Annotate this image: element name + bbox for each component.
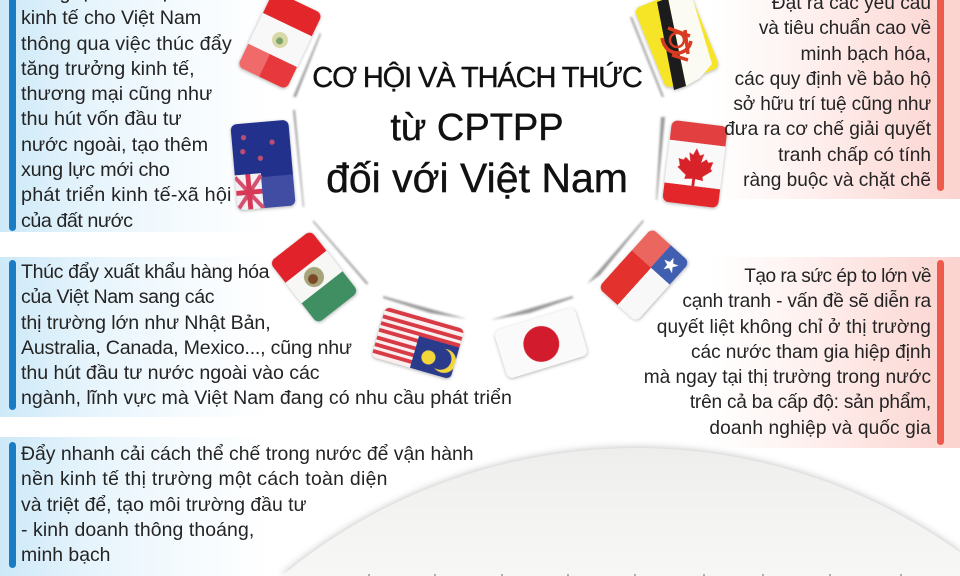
text block: high standards: ràng buộc và chặt chẽ — [743, 170, 931, 191]
blue bar: middle left — [9, 260, 16, 410]
flag: Peru — [238, 0, 322, 90]
text block: institutional reform: - kinh doanh thông thoáng, — [21, 519, 254, 541]
text block: competition pressure: cạnh tranh - vấn đề sẽ diễn ra — [682, 291, 931, 312]
text block: high standards: và tiêu chuẩn cao về — [759, 18, 931, 39]
blue bar: top left — [9, 0, 16, 231]
flag: Mexico — [270, 230, 358, 324]
text block: economic benefits — [21, 0, 235, 232]
text block: competition pressure: trên cả ba cấp độ: sản phẩm, — [690, 392, 931, 413]
panel: left bottom background — [0, 437, 330, 576]
flag: Japan — [494, 307, 588, 379]
text block: economic benefits: thu hút vốn đầu tư — [21, 108, 182, 130]
text block: competition pressure: các nước tham gia hiệp định — [691, 342, 931, 363]
text block: competition pressure: mà ngay tại thị trường trong nước — [644, 367, 931, 388]
plate: bottom circle — [282, 448, 960, 576]
flag: Brunei — [634, 0, 720, 90]
text block: economic benefits: phát triển kinh tế-xã hội — [21, 184, 232, 206]
panel: left middle background — [0, 257, 330, 417]
flag: Malaysia — [371, 307, 466, 380]
text block: export promotion — [21, 261, 512, 409]
text block: high standards: đưa ra cơ chế giải quyết — [724, 119, 931, 140]
text block: economic benefits: nước ngoài, tạo thêm — [21, 134, 208, 156]
text block: economic benefits: thương mại cũng như — [21, 83, 212, 105]
text block: economic benefits: tăng trưởng kinh tế, — [21, 58, 195, 80]
text block: economic benefits: của đất nước — [21, 210, 132, 232]
title — [312, 62, 642, 201]
flag: Canada — [662, 120, 728, 208]
text block: export promotion: thu hút đầu tư nước ngoài vào các — [21, 362, 320, 384]
text block: export promotion: Australia, Canada, Mexico..., cũng như — [21, 337, 352, 359]
flag: New Zealand — [230, 120, 296, 210]
title line 2: từ CPTPP — [390, 107, 564, 149]
text block: competition pressure — [644, 266, 932, 439]
graphic: plate, wheel and flags — [229, 0, 960, 576]
text block: institutional reform — [21, 443, 474, 566]
text block: high standards — [724, 0, 931, 191]
wheel: shadow spokes between flags — [293, 17, 665, 320]
title line 3: đối với Việt Nam — [326, 155, 628, 201]
text block: competition pressure: doanh nghiệp và quốc gia — [709, 418, 931, 439]
text block: high standards: sở hữu trí tuệ cũng như — [733, 94, 931, 115]
text block: economic benefits: xung lực mới cho — [21, 159, 170, 181]
panel: left top background — [0, 0, 330, 232]
text block: institutional reform: và triệt để, tạo môi trường đầu tư — [21, 494, 307, 516]
flag: Chile — [598, 228, 690, 322]
text block: export promotion: Thúc đẩy xuất khẩu hàng hóa — [21, 261, 269, 283]
text block: institutional reform: nền kinh tế thị trường một cách toàn diện — [21, 468, 388, 490]
red bar: bottom right — [937, 260, 944, 445]
text block: export promotion: của Việt Nam sang các — [21, 286, 214, 308]
text block: export promotion: ngành, lĩnh vực mà Việt Nam đang có nhu cầu phát triển — [21, 387, 512, 409]
text block: competition pressure: quyết liệt không chỉ ở thị trường — [657, 317, 931, 338]
text block: institutional reform: Đẩy nhanh cải cách thể chế trong nước để vận hành — [21, 443, 474, 465]
panel: right bottom background — [700, 257, 960, 448]
text block: economic benefits: kinh tế cho Việt Nam — [21, 7, 201, 29]
text block: high standards: tranh chấp có tính — [778, 145, 931, 166]
blue bar: bottom left — [9, 442, 16, 568]
text block: high standards: các quy định về bảo hộ — [735, 69, 931, 90]
text block: institutional reform: minh bạch — [21, 544, 110, 566]
text block: economic benefits: thông qua việc thúc đẩy — [21, 33, 232, 55]
title line 1: CƠ HỘI VÀ THÁCH THỨC — [312, 62, 642, 94]
text block: high standards: minh bạch hóa, — [800, 44, 931, 65]
text block: competition pressure: Tạo ra sức ép to lớn về — [744, 266, 931, 287]
red bar: top right — [937, 0, 944, 191]
panel: right top background — [700, 0, 960, 199]
text block: export promotion: thị trường lớn như Nhật Bản, — [21, 312, 271, 334]
